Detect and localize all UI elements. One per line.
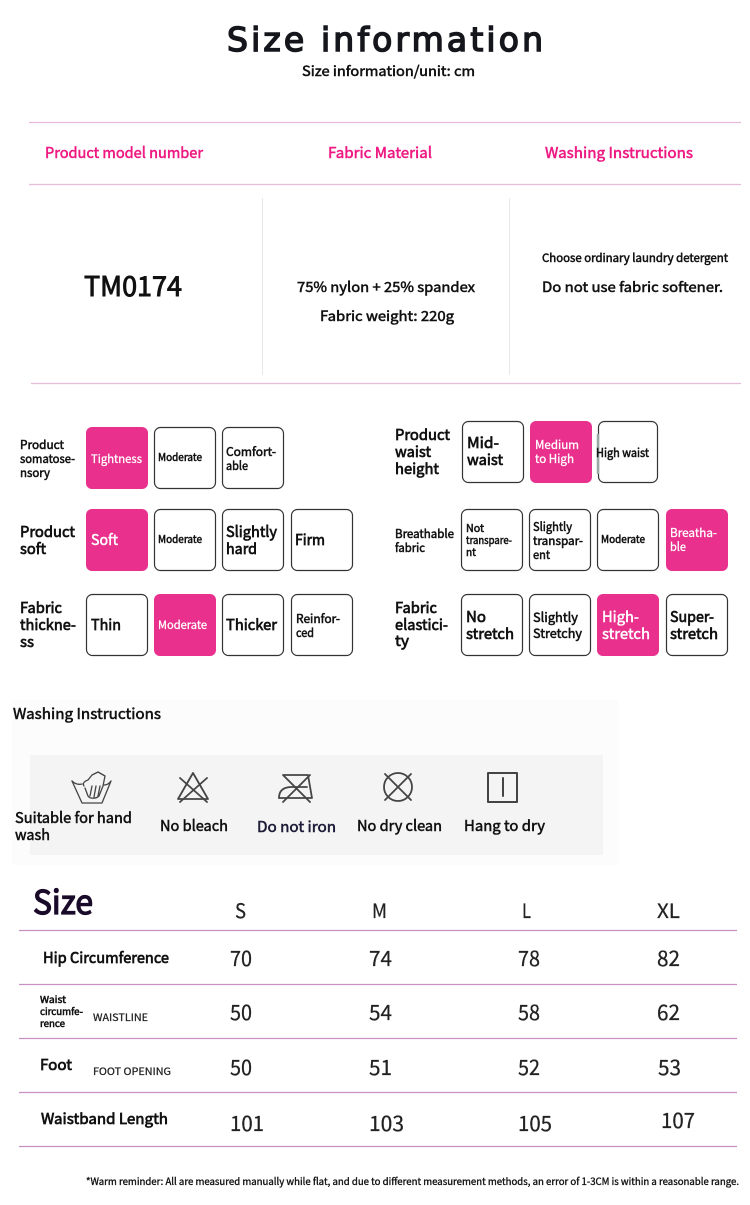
row: foot opening: 53 (658, 1052, 681, 1082)
washing note: Choose ordinary laundry detergent (542, 250, 729, 266)
row: waistband length: 101 (230, 1108, 264, 1138)
option: mid-waist: waist (467, 449, 503, 470)
panel: product soft: Product (20, 521, 75, 542)
size columns: L (522, 895, 531, 924)
panel: fabric thickness: Fabric (20, 597, 62, 618)
footnote: *Warm reminder: All are measured manually while flat, and due to different measurement methods, an error of 1-3CM is within a reasonable range. (86, 1173, 739, 1188)
option: tightness (86, 427, 148, 489)
option: thicker: Thicker (226, 614, 277, 635)
panel: fabric elasticity: ty (395, 630, 409, 651)
row: waist circumference: Waist (40, 992, 66, 1006)
panel: product waist height: waist (395, 441, 431, 462)
panel: breathable fabric (395, 509, 728, 571)
panel: fabric thickness (20, 594, 352, 656)
option: slightly transparent: transpar- (533, 532, 583, 549)
option: super-stretch: Super- (670, 606, 714, 627)
option: mid-waist (462, 422, 524, 482)
panel: washing instructions (12, 700, 618, 865)
row: hip circumference: 82 (657, 943, 680, 973)
option: moderate (154, 428, 216, 488)
option: not transparent: Not (466, 521, 484, 536)
option: high-stretch: High- (602, 606, 639, 627)
option: mid-waist: Mid- (467, 432, 499, 453)
panel: product waist height (395, 421, 658, 483)
option: slightly stretchy: Slightly (533, 607, 578, 626)
row: hip circumference (43, 943, 680, 973)
row: hip circumference: 78 (518, 943, 540, 973)
row: waistband length: 105 (518, 1108, 552, 1138)
option: moderate: Moderate (158, 617, 207, 633)
row: waist circumference (40, 992, 680, 1030)
panel: fabric thickness: ss (20, 631, 34, 652)
table heading: size: Size (33, 876, 93, 924)
row: hip circumference: 70 (230, 943, 252, 973)
option: not transparent: nt (466, 545, 476, 560)
label: hang to dry: Hang to dry (464, 815, 545, 836)
size columns: S (235, 895, 246, 924)
option: moderate: Moderate (158, 532, 202, 547)
icon: do not iron (279, 775, 312, 802)
row: waist circumference: 58 (518, 997, 540, 1027)
panel: product waist height: Product (395, 424, 450, 445)
label: do not iron: Do not iron (257, 816, 336, 837)
row: waist circumference: WAISTLINE (93, 1009, 148, 1024)
panel: product somatosensory (20, 427, 284, 489)
panel: fabric elasticity: Fabric (395, 597, 437, 618)
washing note (542, 250, 729, 297)
size columns: XL (657, 895, 680, 924)
option: slightly hard (222, 510, 284, 570)
option: high-stretch: stretch (602, 623, 650, 644)
option: super-stretch: stretch (670, 623, 718, 644)
option: high waist (596, 422, 658, 482)
option: comfortable: Comfort- (226, 443, 276, 460)
option: thin (86, 594, 148, 656)
option: slightly stretchy (530, 594, 590, 656)
option: moderate (154, 594, 216, 656)
option: slightly transparent: ent (533, 546, 550, 563)
washing heading: Washing Instructions (13, 703, 161, 724)
row: waist circumference: circumfe- (40, 1004, 83, 1018)
icon: no dry clean (384, 773, 412, 801)
option: tightness: Tightness (91, 451, 142, 467)
option: comfortable: able (226, 457, 248, 474)
icon: hang to dry (488, 773, 517, 802)
panel: product soft (20, 509, 352, 571)
row: waistband length: 103 (369, 1108, 404, 1138)
label: no dry clean: No dry clean (357, 815, 442, 836)
row: waist circumference: rence (40, 1016, 65, 1030)
panel: product soft: soft (20, 538, 46, 559)
option: no stretch (462, 594, 522, 656)
row: foot opening (40, 1052, 681, 1082)
panel: product somatosensory: Product (20, 436, 64, 453)
row: foot opening: 52 (518, 1052, 540, 1082)
panel: fabric elasticity: elastici- (395, 614, 448, 635)
option: no stretch: stretch (466, 623, 514, 644)
icon: hand wash (72, 772, 111, 803)
option: reinforced: Reinfor- (296, 610, 340, 627)
row: hip circumference: 74 (369, 943, 392, 973)
option: reinforced: ced (296, 624, 314, 641)
option: no stretch: No (466, 606, 486, 627)
option: slightly transparent: Slightly (533, 518, 573, 535)
option: not transparent (462, 510, 522, 570)
row: foot opening: FOOT OPENING (93, 1063, 171, 1078)
option: comfortable (222, 428, 284, 488)
label: suitable for hand wash: Suitable for hand (15, 807, 132, 828)
option: super-stretch (666, 594, 728, 656)
model number: TM0174 (84, 265, 182, 304)
panel: fabric elasticity (395, 594, 728, 656)
option: moderate (598, 510, 658, 570)
panel: product somatosensory: somatose- (20, 450, 75, 467)
fabric composition (297, 277, 475, 326)
option: breathable (666, 509, 728, 571)
row: waistband length (41, 1105, 695, 1138)
heading: fabric material: Fabric Material (328, 142, 432, 163)
option: medium to high (530, 421, 592, 483)
panel: product waist height: height (395, 458, 439, 479)
option: firm: Firm (295, 529, 325, 550)
option: firm (292, 510, 352, 570)
size columns (235, 895, 680, 924)
row: foot opening: 50 (230, 1052, 252, 1082)
label: suitable for hand wash (15, 807, 132, 845)
option: breathable: Breatha- (670, 524, 717, 541)
row: waist circumference: 62 (657, 997, 680, 1027)
row: foot opening: Foot (40, 1054, 72, 1075)
panel: fabric thickness: thickne- (20, 614, 76, 635)
row: hip circumference: Hip Circumference (43, 947, 169, 968)
option: reinforced (292, 594, 352, 656)
label: suitable for hand wash: wash (15, 824, 50, 845)
heading: washing instructions: Washing Instructions (545, 142, 693, 163)
row: waistband length: Waistband Length (41, 1108, 168, 1129)
row: waistband length: 107 (661, 1105, 695, 1135)
label: no bleach: No bleach (160, 815, 228, 836)
option: moderate (154, 510, 216, 570)
option: slightly transparent (530, 510, 590, 570)
option: moderate: Moderate (158, 450, 202, 465)
option: high waist: High waist (596, 444, 649, 461)
option: thin: Thin (91, 614, 121, 635)
size columns: M (372, 895, 387, 924)
heading: product model number: Product model number (45, 142, 203, 163)
option: not transparent: transpare- (466, 533, 512, 548)
row: foot opening: 51 (369, 1052, 392, 1082)
option: soft (86, 509, 148, 571)
option: high-stretch (597, 594, 659, 656)
option: medium to high: Medium (535, 436, 579, 453)
row: waist circumference: 54 (369, 997, 392, 1027)
option: slightly hard: hard (226, 538, 257, 559)
panel: breathable fabric: fabric (395, 539, 425, 556)
option: thicker (222, 594, 284, 656)
panel: breathable fabric: Breathable (395, 525, 454, 542)
icon: no bleach (178, 773, 208, 802)
fabric composition: Fabric weight: 220g (320, 306, 454, 326)
size table (19, 876, 737, 1146)
title: Size information (227, 20, 543, 59)
option: moderate: Moderate (601, 532, 645, 547)
row: waist circumference: 50 (230, 997, 252, 1027)
option: soft: Soft (91, 529, 118, 550)
panel: product somatosensory: nsory (20, 464, 51, 481)
washing note: Do not use fabric softener. (542, 277, 723, 297)
option: slightly stretchy: Stretchy (533, 623, 582, 642)
option: breathable: ble (670, 538, 686, 555)
option: medium to high: to High (535, 450, 574, 467)
option: slightly hard: Slightly (226, 521, 277, 542)
subtitle: Size information/unit: cm (302, 61, 475, 81)
fabric composition: 75% nylon + 25% spandex (297, 277, 475, 297)
